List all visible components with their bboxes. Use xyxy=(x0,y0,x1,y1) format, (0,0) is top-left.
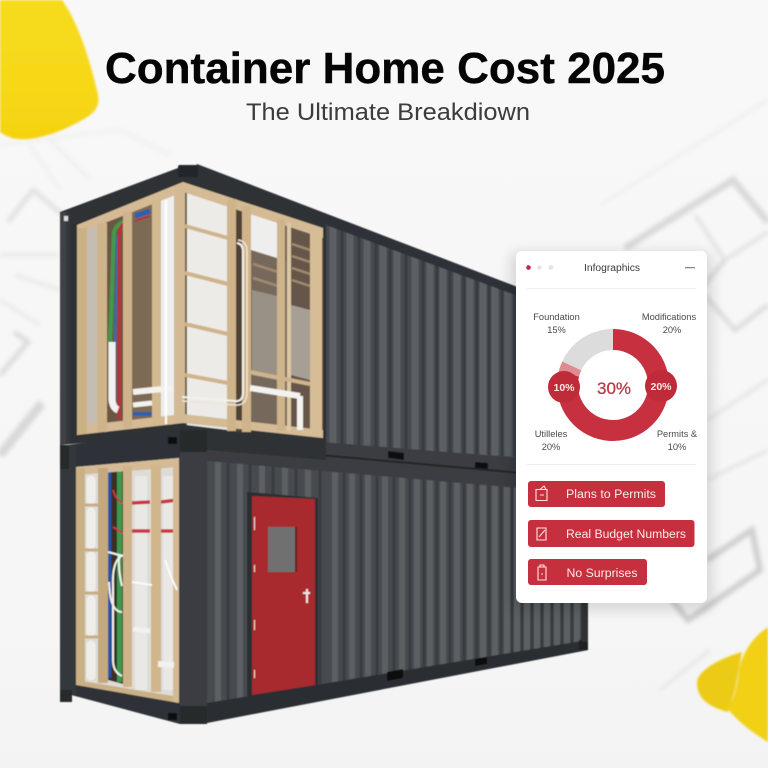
button: plans to permits: Plans to Permits xyxy=(566,489,656,501)
lower plumbing pipes xyxy=(108,552,177,676)
icon: edit document xyxy=(537,528,546,540)
door hinges xyxy=(254,517,256,678)
label: utilities: 20% xyxy=(542,442,560,452)
button: real budget numbers xyxy=(528,520,694,547)
button: no surprises: No Surprises xyxy=(566,568,638,580)
door handle xyxy=(303,589,310,603)
panel: infographics card xyxy=(516,251,707,603)
blueprint background drawings xyxy=(0,100,768,690)
label: foundation: Foundation xyxy=(533,312,580,322)
donut chart xyxy=(548,340,677,430)
door xyxy=(247,492,318,697)
icon: thumbs document xyxy=(536,486,547,500)
lower cutaway interior with insulation xyxy=(76,458,179,703)
lower wiring xyxy=(109,468,177,682)
hard hat top left xyxy=(0,0,98,139)
upper cutaway interior with insulation xyxy=(77,182,323,438)
card shadow xyxy=(510,252,712,610)
title: Container Home Cost 2025 xyxy=(105,44,665,93)
upper plumbing pipes xyxy=(133,200,300,430)
left bubble 10%: 10% xyxy=(553,382,575,394)
upper framing studs xyxy=(77,182,323,438)
centre value: 30% xyxy=(597,379,631,398)
lower container side wall xyxy=(207,446,588,723)
right bubble 20%: 20% xyxy=(650,381,672,393)
button: real budget numbers: Real Budget Numbers xyxy=(566,529,686,541)
subtitle: The Ultimate Breakdiown xyxy=(246,99,530,126)
upper wiring xyxy=(110,211,152,420)
label: modifications: 20% xyxy=(663,325,681,335)
label: permits: Permits & xyxy=(657,429,697,439)
minimise icon xyxy=(685,267,695,268)
card window dots xyxy=(526,265,553,270)
card title: Infographics xyxy=(584,263,640,274)
upper container side wall xyxy=(196,163,516,474)
label: permits: 10% xyxy=(668,442,686,452)
label: modifications: Modifications xyxy=(642,312,696,322)
hard hat bottom right xyxy=(697,627,768,742)
shipping container stack xyxy=(60,164,600,724)
icon: clipboard xyxy=(538,565,546,580)
door window xyxy=(268,527,295,572)
lower container dark corner casing xyxy=(60,430,207,724)
label: utilities: Utilleles xyxy=(535,429,567,439)
upper container dark corner casing xyxy=(60,165,326,460)
button: plans to permits xyxy=(528,481,665,507)
lower framing studs xyxy=(76,458,179,703)
label: foundation: 15% xyxy=(547,325,566,335)
button: no surprises xyxy=(528,559,647,585)
